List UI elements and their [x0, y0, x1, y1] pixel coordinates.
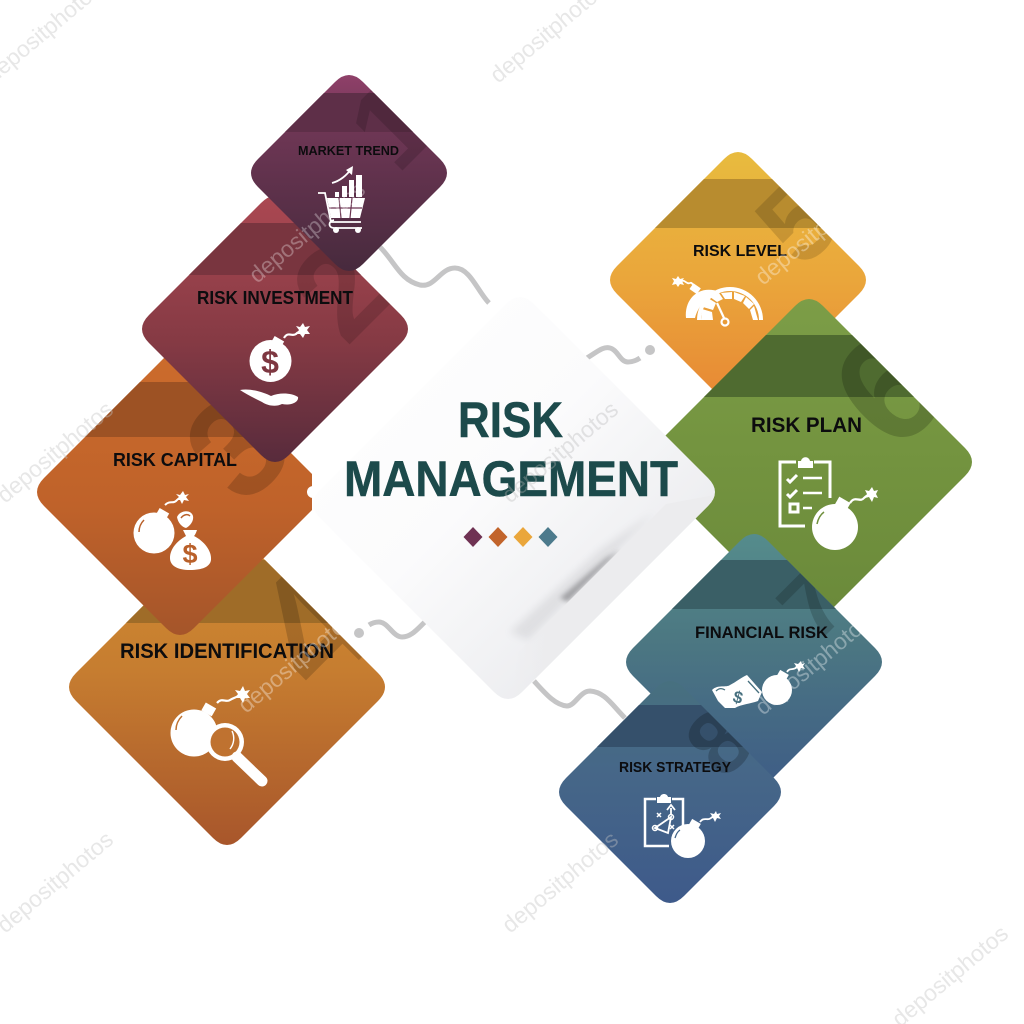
label: RISK INVESTMENT	[197, 288, 353, 308]
panel: financial risk	[626, 534, 882, 778]
title: MANAGEMENT	[344, 451, 678, 507]
connector: risk identification to center	[354, 620, 427, 638]
panel: risk level	[610, 152, 866, 389]
panel: risk investment: 2	[263, 213, 417, 367]
icon dollar sign: $	[731, 687, 745, 708]
watermark: depositphotos	[244, 176, 370, 288]
panel: risk strategy: 8	[667, 690, 773, 796]
icon dollar sign: $	[182, 539, 198, 569]
icon bomb	[812, 487, 878, 550]
label: RISK CAPITAL	[113, 450, 237, 470]
icon: shopping cart with growth bars	[318, 166, 365, 233]
title: RISK	[458, 392, 563, 448]
panel: market trend: 1	[325, 58, 460, 193]
watermark: depositphotos	[233, 606, 359, 718]
icon: bomb and money bag	[134, 491, 211, 570]
panel: risk investment	[130, 196, 420, 462]
connector: center to financial risk	[534, 681, 625, 718]
panel: risk strategy	[559, 694, 781, 903]
icon: bomb with magnifier	[170, 686, 262, 781]
panel: risk plan	[666, 299, 972, 607]
icon dollar sign: $	[261, 344, 279, 380]
panel: risk plan: 6	[799, 300, 977, 478]
label: RISK IDENTIFICATION	[120, 640, 334, 663]
label: RISK STRATEGY	[619, 760, 731, 776]
icon: banknote with bomb	[712, 661, 805, 708]
icon bomb	[671, 811, 721, 858]
connector: risk level to center	[587, 345, 655, 362]
panel: risk capital	[37, 358, 312, 635]
icon: checklist with bomb	[780, 457, 830, 526]
icon: bomb with gauge	[672, 276, 763, 326]
panel: risk identification	[69, 558, 385, 845]
icon: dollar bomb over hand	[240, 323, 310, 406]
notch: card corner cut-out	[307, 470, 336, 515]
panel: center card	[346, 356, 715, 699]
watermark: depositphotos	[750, 178, 876, 290]
label: MARKET TREND	[298, 143, 399, 158]
label: FINANCIAL RISK	[695, 624, 828, 642]
decorative colored diamonds	[464, 527, 558, 547]
panel: market trend	[251, 75, 447, 271]
panel: financial risk: 7	[760, 553, 866, 659]
panel: risk capital: 3	[154, 364, 320, 530]
label: RISK PLAN	[751, 414, 862, 437]
watermark: depositphotos	[497, 396, 623, 508]
panel: risk identification: 4	[215, 528, 410, 723]
connector: market trend to center	[380, 247, 489, 303]
panel: risk level: 5	[732, 157, 863, 288]
watermark: depositphotos	[750, 608, 876, 720]
icon: strategy board with bomb	[645, 794, 683, 846]
label: RISK LEVEL	[693, 243, 787, 260]
watermark: depositphotos	[497, 826, 623, 938]
title	[344, 392, 678, 507]
